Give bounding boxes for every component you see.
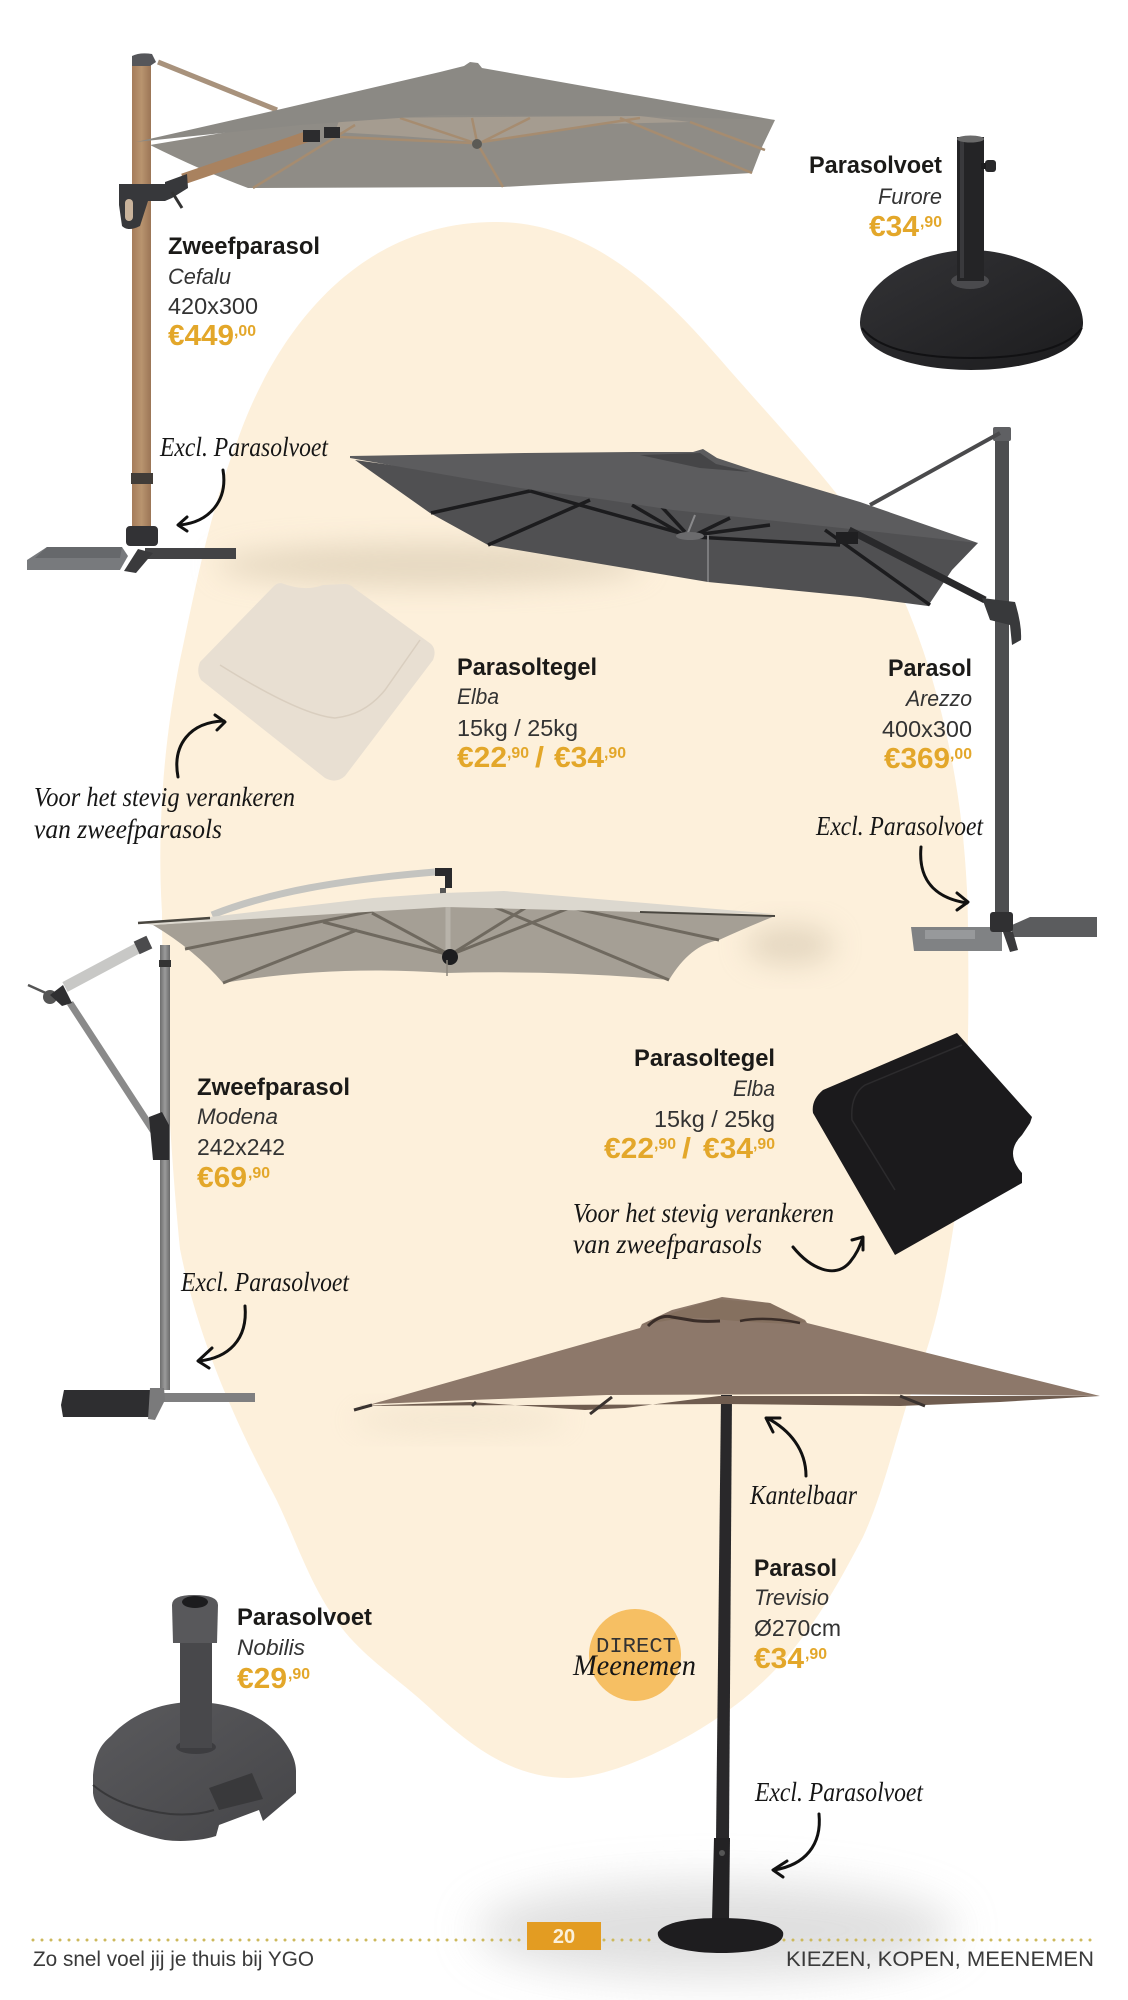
text: Parasol Trevisio: [754, 1555, 841, 1675]
arrow: [178, 470, 224, 531]
text: Parasol Arezzo: €369: [884, 743, 950, 775]
clamp: [119, 174, 188, 229]
text: Parasoltegel Elba cream: /: [535, 742, 544, 774]
note: excl. base Cefalu: Excl. Parasolvoet: [159, 432, 329, 462]
note: excl. base Arezzo: Excl. Parasolvoet: [815, 811, 984, 841]
clamp: [982, 598, 1021, 645]
umbrella: Cefalu cantilever parasol: [27, 53, 775, 573]
text: Zweefparasol Modena: Modena: [197, 1104, 278, 1129]
page number: [527, 1922, 601, 1950]
arrow: [177, 715, 225, 777]
strut: [70, 1003, 156, 1135]
text: Parasoltegel Elba cream: €34: [554, 742, 604, 774]
background blob: [160, 222, 968, 1778]
note: Kantelbaar: Kantelbaar: [749, 1480, 857, 1510]
note: Kantelbaar: [749, 1418, 857, 1510]
text: Parasoltegel Elba black: 15kg / 25kg: [654, 1106, 775, 1132]
footer right: KIEZEN, KOPEN, MEENEMEN: [786, 1948, 1094, 1971]
text: Parasolvoet Furore: Furore: [878, 184, 942, 209]
pole: [132, 60, 151, 530]
underside: [153, 905, 775, 983]
canopy underside: [150, 100, 775, 188]
text: Parasoltegel Elba black: [604, 1045, 775, 1165]
text: Parasolvoet Furore: ,90: [920, 214, 942, 231]
underside: [355, 460, 978, 606]
text: Parasoltegel Elba cream: €22: [457, 742, 507, 774]
text: Parasolvoet Furore: €34: [869, 211, 919, 243]
text: Parasoltegel Elba black: Parasoltegel: [634, 1045, 775, 1072]
canopy front band: [358, 1396, 1100, 1410]
text: Parasoltegel Elba black: €34: [703, 1133, 753, 1165]
pole: [160, 945, 170, 1390]
note: anchoring Elba cream: [34, 715, 295, 844]
text: Parasolvoet Furore: [809, 152, 942, 243]
text: Parasoltegel Elba cream: ,90: [507, 745, 529, 762]
lower arm: [65, 947, 140, 987]
pole: [716, 1395, 732, 1840]
text: Zweefparasol Cefalu: €449: [168, 320, 234, 352]
note: anchoring Elba black: Voor het stevig verankeren: [573, 1198, 834, 1228]
base: [658, 1918, 783, 1953]
text: Parasoltegel Elba black: /: [682, 1133, 691, 1165]
text: Parasol Arezzo: Parasol: [888, 655, 972, 682]
text: Parasol Trevisio: €34: [754, 1643, 804, 1675]
curved arm: [212, 872, 435, 915]
ribs: [253, 118, 765, 188]
arrow: [198, 1306, 245, 1368]
brace: [158, 62, 277, 110]
arrow: [773, 1814, 819, 1877]
text: Parasolvoet Nobilis: [237, 1604, 372, 1695]
footer left: Zo snel voel jij je thuis bij YGO: [33, 1948, 314, 1971]
text: Parasol Trevisio: Trevisio: [754, 1585, 829, 1610]
text: Parasolvoet Furore: Parasolvoet: [809, 152, 942, 179]
text: Parasolvoet Nobilis: €29: [237, 1663, 287, 1695]
text: Zweefparasol Cefalu: Cefalu: [168, 264, 231, 289]
badge: direct meenemen: [572, 1609, 696, 1701]
text: Zweefparasol Cefalu: 420x300: [168, 293, 258, 319]
note: excl. base Arezzo: [815, 811, 984, 910]
rib tips: [354, 1396, 925, 1414]
text: Parasol Arezzo: [882, 655, 972, 775]
text: Parasol Arezzo: Arezzo: [904, 686, 972, 711]
arrow: [921, 847, 968, 910]
note: anchoring Elba cream: van zweefparasols: [34, 814, 222, 844]
text: Parasolvoet Nobilis: Nobilis: [237, 1635, 305, 1660]
text: Zweefparasol Modena: [197, 1074, 350, 1194]
footer: [33, 1922, 1095, 1971]
text: Parasoltegel Elba black: ,90: [753, 1136, 775, 1153]
text: Parasolvoet Nobilis: Parasolvoet: [237, 1604, 372, 1631]
note: anchoring Elba black: [573, 1198, 863, 1271]
product: black parasol tile: [813, 1033, 1032, 1255]
text: Parasoltegel Elba cream: [457, 654, 626, 774]
product: cream parasol tile: [198, 583, 435, 781]
soft shadows: [215, 543, 956, 1978]
canopy top: [350, 449, 978, 543]
pole: [995, 431, 1009, 926]
text: Zweefparasol Modena: Zweefparasol: [197, 1074, 350, 1101]
arrow: [766, 1418, 806, 1476]
text: Parasoltegel Elba cream: Parasoltegel: [457, 654, 597, 681]
text: Zweefparasol Cefalu: [168, 233, 320, 352]
text: Parasoltegel Elba cream: 15kg / 25kg: [457, 715, 578, 741]
text: Zweefparasol Cefalu: Zweefparasol: [168, 233, 320, 260]
text: Parasol Trevisio: Ø270cm: [754, 1615, 841, 1641]
text: Zweefparasol Modena: 242x242: [197, 1134, 285, 1160]
canopy top: [138, 891, 775, 925]
foot: [131, 473, 153, 484]
arm: [849, 530, 985, 600]
text: Zweefparasol Cefalu: ,00: [234, 323, 256, 340]
note: excl. base Trevisio: [754, 1777, 924, 1877]
canopy top: [136, 62, 775, 142]
text: Parasoltegel Elba black: €22: [604, 1133, 654, 1165]
umbrella: Arezzo cantilever parasol: [350, 427, 1097, 952]
text: Parasol Trevisio: ,90: [805, 1646, 827, 1663]
text: Parasoltegel Elba cream: Elba: [457, 684, 499, 709]
text: Parasol Trevisio: Parasol: [754, 1555, 837, 1582]
umbrella: Trevisio parasol: [353, 1297, 1100, 1953]
text: Parasoltegel Elba cream: ,90: [604, 745, 626, 762]
badge: direct meenemen: DIRECT: [596, 1636, 676, 1659]
note: excl. base Modena: [180, 1267, 350, 1368]
foot: [150, 1393, 255, 1402]
text: Parasoltegel Elba black: ,90: [654, 1136, 676, 1153]
text: Parasol Arezzo: ,00: [950, 746, 972, 763]
canopy top: [353, 1297, 1100, 1410]
note: anchoring Elba cream: Voor het stevig verankeren: [34, 782, 295, 812]
arrow: [793, 1237, 863, 1271]
note: excl. base Cefalu: [159, 432, 329, 531]
product: Furore parasol base: [860, 136, 1083, 370]
umbrella: Modena cantilever parasol: [28, 868, 775, 1420]
text: Parasol Arezzo: 400x300: [882, 716, 972, 742]
note: anchoring Elba black: van zweefparasols: [573, 1229, 762, 1259]
text: Zweefparasol Modena: €69: [197, 1162, 247, 1194]
page number: 20: [553, 1926, 575, 1948]
arm: [183, 137, 306, 179]
note: excl. base Trevisio: Excl. Parasolvoet: [754, 1777, 924, 1807]
product: Nobilis parasol base: [93, 1595, 296, 1841]
badge: direct meenemen: Meenemen: [572, 1649, 696, 1682]
text: Parasolvoet Nobilis: ,90: [288, 1666, 310, 1683]
text: Parasoltegel Elba black: Elba: [733, 1076, 775, 1101]
brace: [870, 433, 1000, 505]
note: excl. base Modena: Excl. Parasolvoet: [180, 1267, 350, 1297]
text: Zweefparasol Modena: ,90: [248, 1165, 270, 1182]
base: [1012, 917, 1097, 937]
